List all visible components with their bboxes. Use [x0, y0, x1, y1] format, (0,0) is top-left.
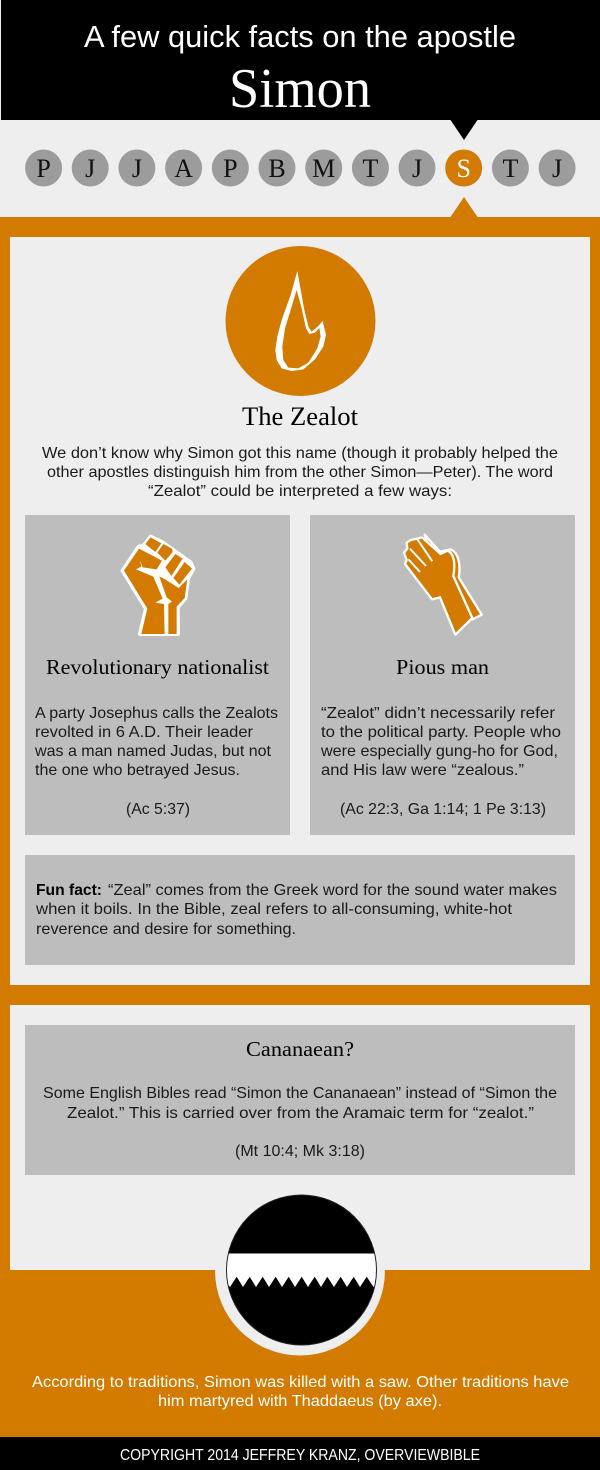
icon: flame: [226, 246, 376, 396]
apostle navigation circles: J: [552, 154, 562, 183]
intro paragraph: [42, 445, 558, 500]
text: revolutionary description: was a man named Judas, but not: [34, 743, 272, 760]
header banner: Simon: [229, 58, 371, 120]
panel: revolutionary nationalist: [25, 515, 290, 835]
reference: Matthew and Mark: (Mt 10:4; Mk 3:18): [235, 1143, 365, 1160]
panel: the zealot: [10, 237, 590, 985]
apostle navigation circles: T: [502, 154, 518, 183]
icon: raised fist: [123, 537, 193, 634]
callout: fun fact: when it boils. In the Bible, zeal refers to all-consuming, white-hot: [35, 901, 513, 918]
apostle navigation circles: P: [223, 154, 238, 183]
text: pious description: were especially gung-ho for God,: [320, 743, 558, 760]
apostle navigation circles: B: [268, 154, 286, 183]
text: pious description: “Zealot” didn’t necessarily refer: [321, 705, 556, 722]
text: martyrdom tradition: him martyred with Thaddaeus (by axe).: [158, 1393, 442, 1410]
callout: fun fact: reverence and desire for something.: [36, 921, 296, 938]
apostle navigation circles: P: [36, 154, 51, 183]
heading: Pious man: Pious man: [396, 655, 490, 679]
apostle navigation circles: J: [132, 154, 142, 183]
text: martyrdom tradition: According to traditions, Simon was killed with a saw. Other traditions have: [32, 1374, 569, 1391]
intro paragraph: “Zealot” could be interpreted a few ways:: [148, 483, 452, 500]
footer: [0, 1437, 600, 1470]
reference: Acts 5:37: (Ac 5:37): [126, 801, 190, 818]
text: revolutionary description: A party Josephus calls the Zealots: [35, 705, 278, 722]
text: cananaean explanation: Some English Bibles read “Simon the Cananaean” instead of “Simon the: [43, 1085, 557, 1102]
icon: saw: [215, 1186, 385, 1356]
heading: The Zealot: The Zealot: [242, 402, 359, 431]
text: revolutionary description: revolted in 6 A.D. Their leader: [35, 724, 254, 741]
text: revolutionary description: the one who betrayed Jesus.: [35, 762, 240, 779]
text: pious description: [320, 705, 561, 779]
apostle navigation circles: M: [312, 154, 335, 183]
text: martyrdom tradition: [32, 1374, 569, 1410]
apostle navigation circles: T: [362, 154, 378, 183]
callout: fun fact: “Zeal” comes from the Greek word for the sound water makes: [108, 882, 557, 899]
header banner: A few quick facts on the apostle: [84, 19, 516, 54]
panel: pious man: [310, 515, 575, 835]
apostle navigation circles: J: [412, 154, 422, 183]
apostle navigation circles: S: [456, 154, 471, 183]
intro paragraph: other apostles distinguish him from the other Simon—Peter). The word: [47, 464, 553, 481]
text: pious description: and His law were “zealous.”: [321, 762, 524, 779]
text: cananaean explanation: [43, 1085, 557, 1122]
reference: Acts, Galatians, 1 Peter: (Ac 22:3, Ga 1:14; 1 Pe 3:13): [340, 801, 546, 818]
text: revolutionary description: [34, 705, 278, 779]
apostle navigation circles: J: [85, 154, 95, 183]
callout: fun fact: [25, 855, 575, 965]
text: pious description: to the political party. People who: [321, 724, 561, 741]
callout: fun fact: Fun fact:: [36, 882, 102, 899]
apostle navigation circles: [25, 150, 576, 186]
icon: praying hands: [404, 535, 482, 635]
header banner: [1, 0, 600, 140]
heading: Cananaean?: Cananaean?: [246, 1037, 354, 1061]
apostle navigation circles: A: [174, 154, 193, 183]
heading: Revolutionary nationalist: Revolutionary nationalist: [46, 655, 269, 679]
footer: COPYRIGHT 2014 JEFFREY KRANZ, OVERVIEWBIBLE: [120, 1447, 480, 1464]
text: cananaean explanation: Zealot.” This is carried over from the Aramaic term for “zealot.”: [67, 1105, 534, 1122]
intro paragraph: We don’t know why Simon got this name (though it probably helped the: [42, 445, 558, 462]
panel: cananaean: [10, 1005, 590, 1270]
